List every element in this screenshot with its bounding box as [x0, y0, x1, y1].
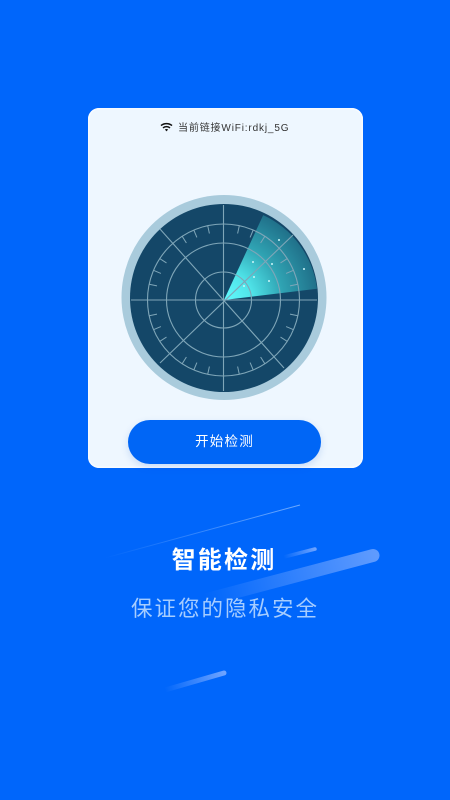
- radar sweep: [224, 215, 317, 300]
- button: start: 开始检测: [195, 434, 254, 449]
- radar blips: [243, 239, 305, 287]
- radar bezel: [122, 195, 326, 400]
- radar grid: [131, 205, 317, 391]
- subtitle: 保证您的隐私安全: [131, 597, 319, 621]
- title: 智能检测: [172, 547, 276, 574]
- button: start: [128, 420, 321, 464]
- icon: wifi: [160, 122, 172, 132]
- decorative streaks: [120, 504, 380, 691]
- wifi text: 当前链接WiFi:rdkj_5G: [178, 123, 289, 134]
- chart: radar: [122, 195, 326, 400]
- radar screen: [130, 204, 318, 392]
- WiFi status line: [160, 122, 289, 134]
- panel: radar card: [88, 108, 363, 468]
